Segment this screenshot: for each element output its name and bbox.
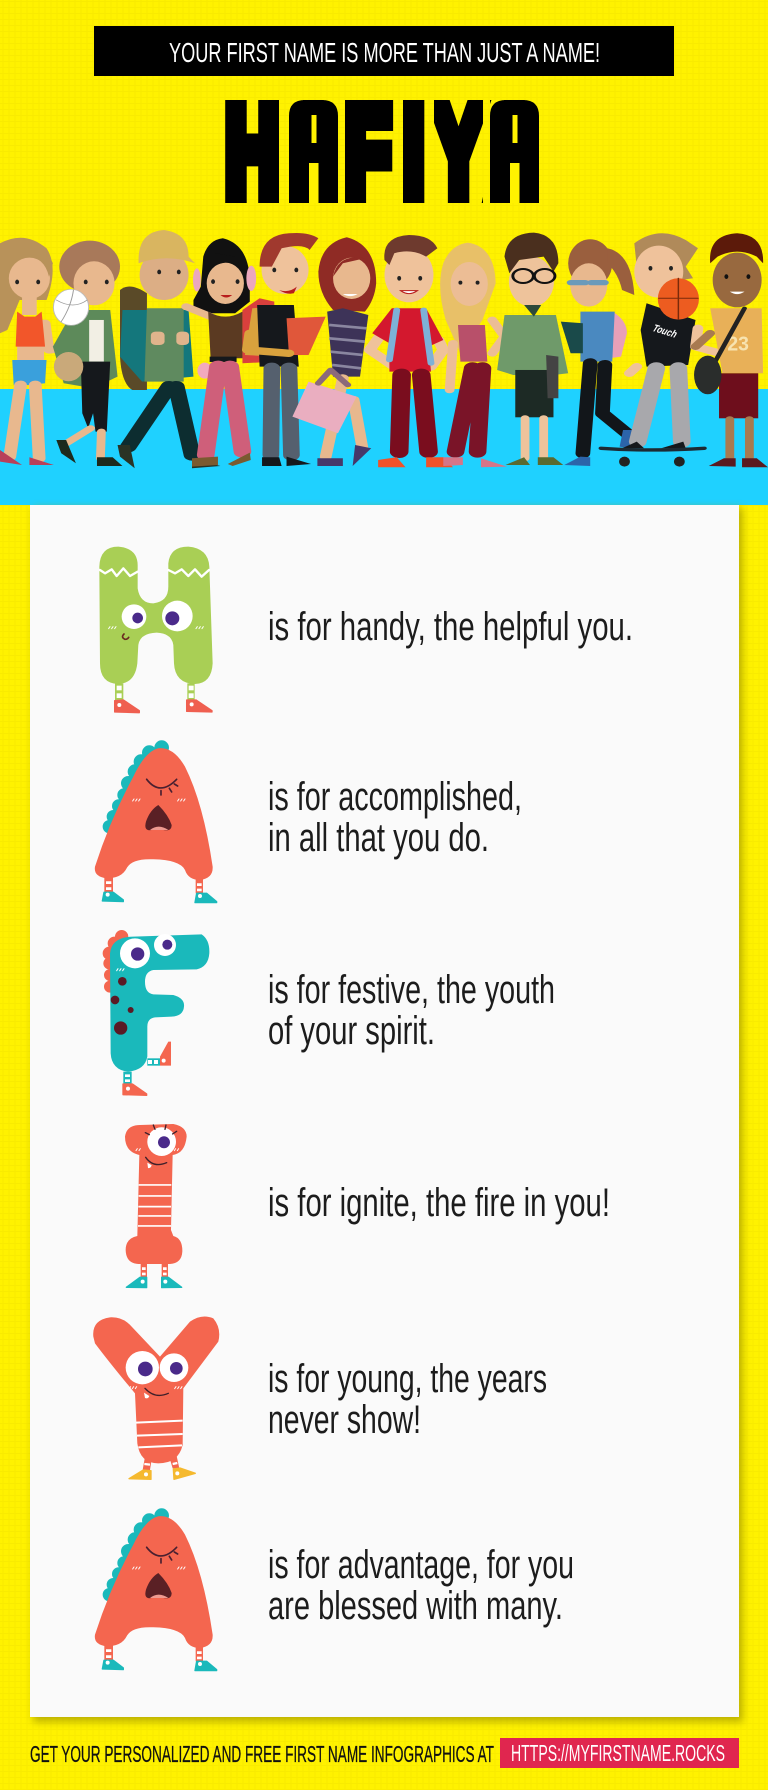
text: I line: is for ignite, the fire in you! (268, 1181, 610, 1225)
row 3: F (103, 930, 555, 1095)
text: H line: is for handy, the helpful you. (268, 605, 633, 649)
text: A line (268, 775, 522, 860)
header banner (94, 26, 674, 76)
person 5: boy with open book (242, 233, 326, 466)
card shadow (33, 508, 743, 1722)
icon: coral monster letter I (125, 1124, 187, 1288)
text: A line: in all that you do. (268, 816, 489, 860)
person 11: boy with basketball on skateboard: Touch (650, 323, 680, 340)
title: name: HAFIYA (226, 81, 541, 221)
text: second A line: is for advantage, for you (268, 1543, 574, 1587)
person 12: boy in yellow tank with bag (694, 233, 768, 467)
row 1: H (99, 547, 633, 713)
icon: coral monster letter A (95, 1508, 217, 1671)
row 5: Y (93, 1316, 547, 1479)
person 6: girl with red hair and pink bag (292, 237, 376, 466)
person 10: girl with glasses and tablet (561, 239, 634, 466)
person 8: blonde girl (440, 243, 507, 467)
person 11: boy with basketball on skateboard (601, 233, 720, 467)
white card panel (30, 505, 739, 1717)
row 2: A (95, 740, 522, 903)
icon: green monster letter H (99, 547, 213, 713)
text: Y line: never show! (268, 1398, 421, 1442)
text: A line: is for accomplished, (268, 775, 522, 819)
text: F line: is for festive, the youth (268, 968, 555, 1012)
person 12: boy in yellow tank with bag: 23 (727, 332, 749, 355)
text: F line: of your spirit. (268, 1009, 435, 1053)
person 4: girl with black hair and headphones (186, 238, 256, 467)
person 1: girl in orange top (0, 238, 76, 465)
icon: coral monster letter Y (93, 1316, 219, 1479)
group of young people illustration (0, 230, 768, 468)
person 7: boy in red t-shirt (370, 235, 453, 467)
text: Y line (268, 1357, 547, 1442)
text: F line (268, 968, 555, 1053)
person 9: boy with glasses and laptop (497, 233, 568, 465)
row 4: I (125, 1124, 610, 1288)
text: second A line: are blessed with many. (268, 1584, 563, 1628)
text: Y line: is for young, the years (268, 1357, 547, 1401)
person 2: girl with volleyball (53, 241, 122, 466)
icon: teal monster letter F (103, 930, 209, 1095)
row 6: A (95, 1508, 574, 1671)
icon: coral monster letter A (95, 740, 217, 903)
blue floor band (0, 389, 768, 505)
text: second A line (268, 1543, 574, 1628)
person 3: boy with cap and backpack (118, 230, 220, 468)
